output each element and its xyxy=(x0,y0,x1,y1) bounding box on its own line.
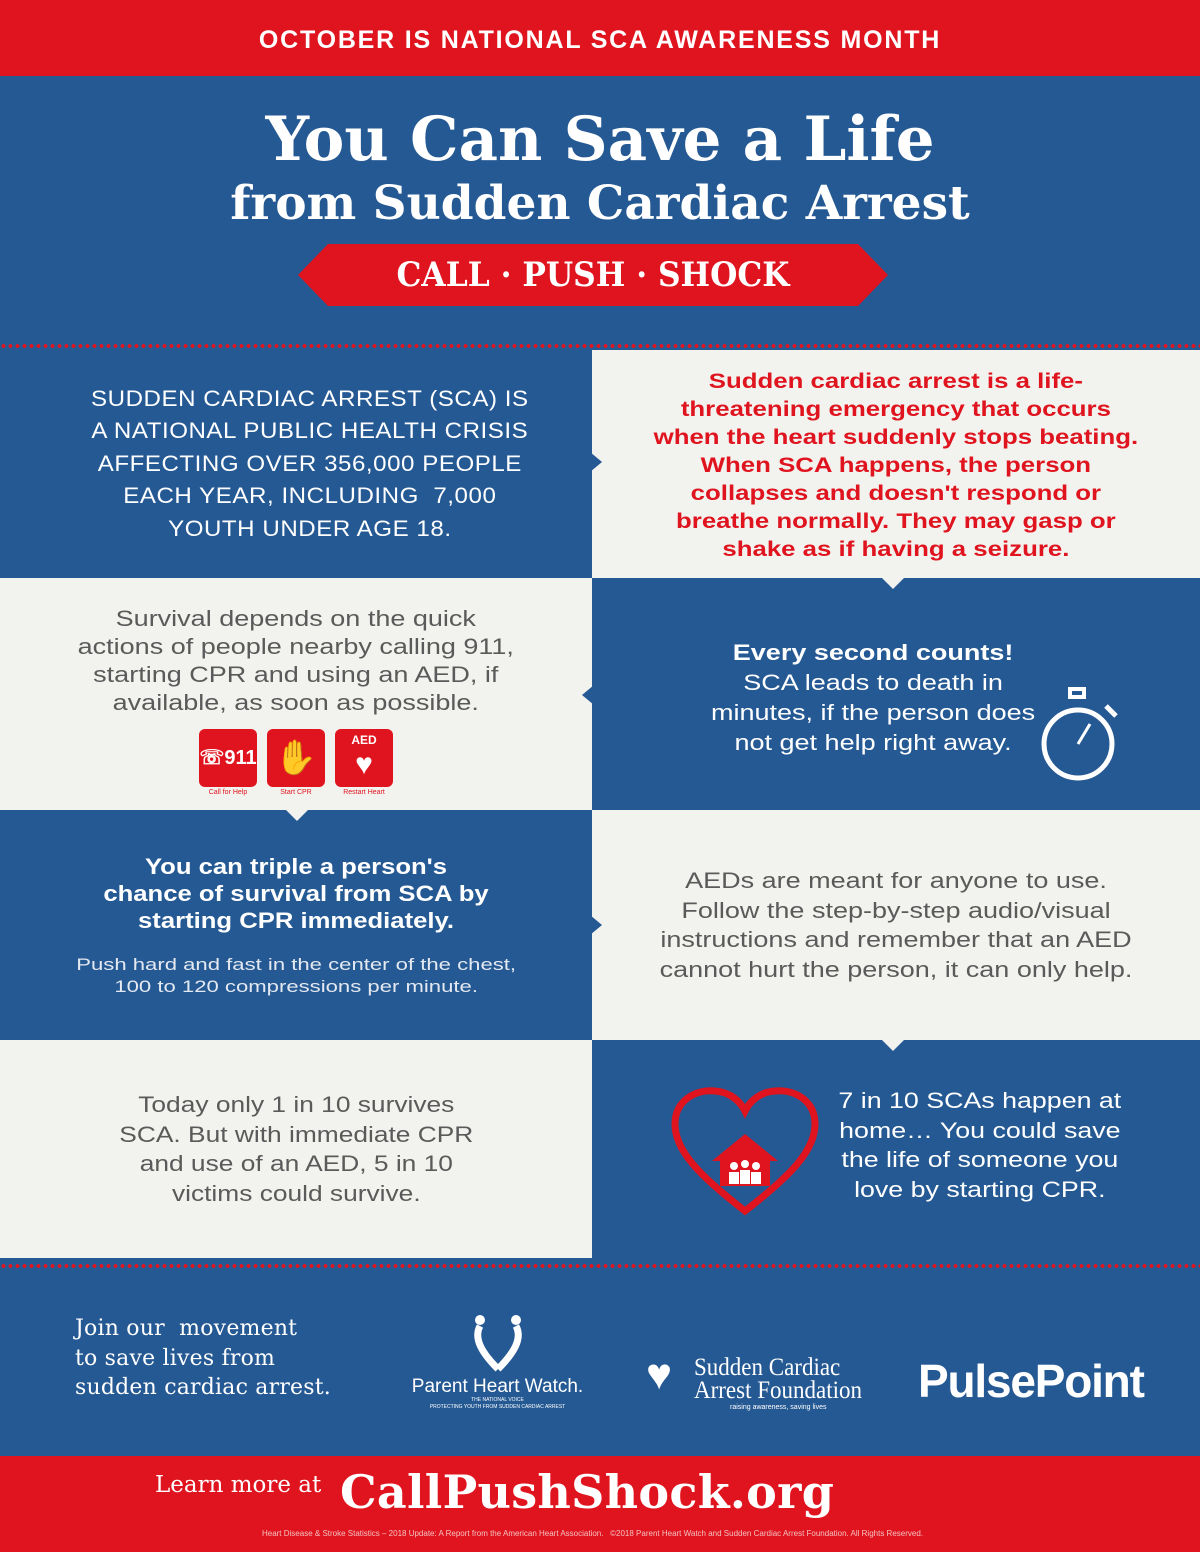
logo: sudden cardiac arrest foundation xyxy=(646,1350,862,1411)
bottom red bar: CallPushShock.org xyxy=(340,1465,834,1519)
panel: definition: shake as if having a seizure. xyxy=(722,537,1070,561)
icons: call, cpr, aed: ✋ xyxy=(275,739,317,777)
panel: definition: threatening emergency that occurs xyxy=(681,397,1111,421)
panel: AEDs for anyone: Follow the step-by-step audio/visual xyxy=(681,898,1111,922)
logo: parent heart watch: Parent Heart Watch. xyxy=(412,1376,583,1397)
panel: definition: Sudden cardiac arrest is a life- xyxy=(709,369,1083,393)
panel: triple chance: Push hard and fast in the center of the chest, xyxy=(76,954,516,974)
panel: every second counts: not get help right away. xyxy=(734,730,1012,755)
panel: definition: collapses and doesn't respond or xyxy=(691,481,1101,505)
panel: 1 in 10: victims could survive. xyxy=(172,1180,420,1206)
icon: stopwatch xyxy=(1042,687,1118,780)
logo: pulsepoint: PulsePoint xyxy=(918,1355,1144,1407)
panel: SCA crisis: A NATIONAL PUBLIC HEALTH CRISIS xyxy=(92,418,528,443)
icons: call, cpr, aed: ☏911 xyxy=(199,747,257,769)
ribbon: call push shock: CALL · PUSH · SHOCK xyxy=(397,255,789,295)
bottom red bar: Heart Disease & Stroke Statistics – 2018 Update: A Report from the American Heart Association. ©2018 Parent Heart Watch and Sudden Cardiac Arrest Foundation. All Rights Reserved. xyxy=(262,1529,923,1538)
top red banner: OCTOBER IS NATIONAL SCA AWARENESS MONTH xyxy=(259,26,941,54)
icons: call, cpr, aed: Start CPR xyxy=(280,789,312,796)
panel: definition: when the heart suddenly stops beating. xyxy=(654,425,1138,449)
logo: parent heart watch xyxy=(412,1315,583,1410)
panel: survival depends xyxy=(0,578,592,810)
panel: every second counts xyxy=(592,578,1200,810)
panel: definition: When SCA happens, the person xyxy=(701,453,1091,477)
logo: parent heart watch: PROTECTING YOUTH FROM SUDDEN CARDIAC ARREST xyxy=(430,1404,565,1410)
panel: 7 in 10 at home: home… You could save xyxy=(839,1118,1121,1142)
footer: join movement: sudden cardiac arrest. xyxy=(75,1375,331,1400)
panel: SCA crisis: SUDDEN CARDIAC ARREST (SCA) IS xyxy=(91,386,529,411)
panel: triple chance: starting CPR immediately. xyxy=(138,908,454,932)
footer: join movement xyxy=(73,1316,331,1400)
icons: call, cpr, aed: Restart Heart xyxy=(343,789,385,796)
title xyxy=(230,104,970,231)
panel: triple chance: 100 to 120 compressions per minute. xyxy=(114,976,478,996)
panel: every second counts: Every second counts! xyxy=(733,640,1013,665)
ribbon: call push shock xyxy=(298,244,888,306)
panel: AEDs for anyone: cannot hurt the person, it can only help. xyxy=(660,956,1132,982)
panel: 7 in 10 at home: love by starting CPR. xyxy=(854,1176,1106,1202)
panel: triple chance: You can triple a person's xyxy=(145,854,447,878)
bottom red bar: Learn more at xyxy=(155,1472,321,1498)
panel: 1 in 10: and use of an AED, 5 in 10 xyxy=(139,1151,453,1176)
panel: SCA crisis: EACH YEAR, INCLUDING 7,000 xyxy=(123,483,497,508)
bottom red bar xyxy=(0,1456,1200,1552)
panel: every second counts: SCA leads to death in xyxy=(743,670,1003,695)
panel: triple chance xyxy=(0,810,592,1040)
text: raising awareness, saving lives xyxy=(730,1404,826,1411)
panel: 1 in 10: Today only 1 in 10 survives xyxy=(138,1092,454,1117)
title: from Sudden Cardiac Arrest xyxy=(230,176,970,231)
logo: parent heart watch: THE NATIONAL VOICE xyxy=(471,1397,524,1403)
icons: call, cpr, aed xyxy=(199,729,393,796)
footer: join movement: Join our movement xyxy=(75,1316,297,1341)
text: Sudden Cardiac xyxy=(694,1354,840,1381)
panel: 7 in 10 at home: 7 in 10 SCAs happen at xyxy=(839,1088,1121,1113)
panel: AEDs for anyone: instructions and remember that an AED xyxy=(660,927,1132,952)
panel: AEDs for anyone xyxy=(592,810,1200,1040)
panel: survival depends: Survival depends on the quick xyxy=(116,606,476,631)
panel: survival depends: starting CPR and using an AED, if xyxy=(93,662,499,687)
icon: heart house xyxy=(672,1087,818,1216)
panel: every second counts: minutes, if the person does xyxy=(711,700,1035,725)
panel: 7 in 10 at home: the life of someone you xyxy=(842,1147,1118,1172)
footer: join movement: to save lives from xyxy=(75,1346,275,1370)
icons: call, cpr, aed: Call for Help xyxy=(209,789,247,796)
text: Arrest Foundation xyxy=(694,1377,862,1404)
panel: triple chance: chance of survival from SCA by xyxy=(103,880,489,906)
icons: call, cpr, aed: AED xyxy=(351,733,377,747)
icons: call, cpr, aed: ♥ xyxy=(355,748,373,781)
top red banner xyxy=(0,0,1200,80)
panel: 7 in 10 at home xyxy=(592,1040,1200,1258)
panel: 1 in 10: SCA. But with immediate CPR xyxy=(119,1122,473,1146)
text: ♥ xyxy=(646,1350,672,1399)
panel: 1 in 10 xyxy=(0,1040,592,1258)
panel: SCA crisis: YOUTH UNDER AGE 18. xyxy=(168,516,452,541)
panel: survival depends: available, as soon as possible. xyxy=(113,690,479,715)
panel: definition: breathe normally. They may gasp or xyxy=(676,509,1116,533)
panel: AEDs for anyone: AEDs are meant for anyone to use. xyxy=(685,868,1107,893)
title: You Can Save a Life xyxy=(265,104,935,175)
panel: survival depends: actions of people nearby calling 911, xyxy=(78,634,514,659)
panel: SCA crisis xyxy=(0,350,592,578)
panel: SCA crisis: AFFECTING OVER 356,000 PEOPLE xyxy=(98,451,522,476)
panel: definition xyxy=(592,350,1200,578)
